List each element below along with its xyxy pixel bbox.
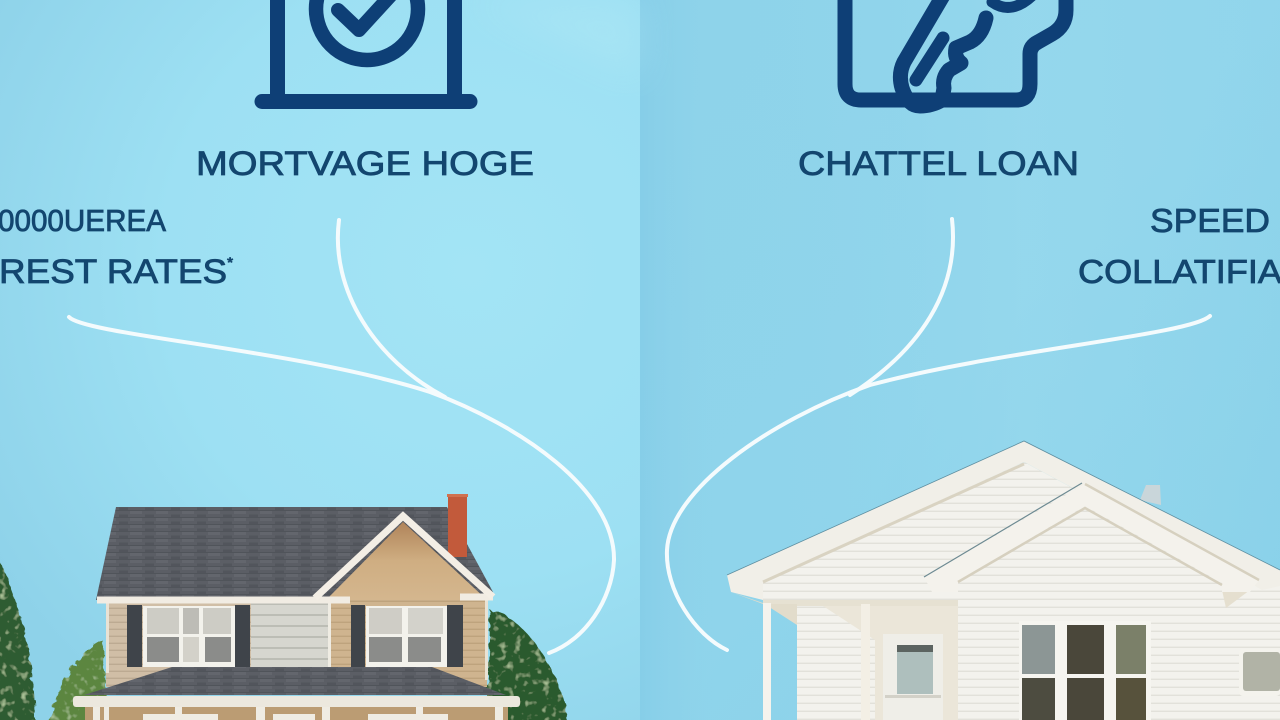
label: left upper: 0000UEREA (0, 203, 166, 238)
trees (0, 562, 568, 720)
soffit under front gable (1222, 590, 1250, 608)
illustration: right white house (727, 441, 1280, 720)
front gable trim shadows (958, 484, 1259, 585)
shutters (127, 605, 463, 667)
main roof (727, 441, 1280, 600)
walls (106, 597, 251, 687)
window left (143, 606, 235, 667)
window right (366, 606, 447, 667)
front gable trim (924, 484, 1259, 592)
heading: chattel loan: CHATTEL LOAN (798, 145, 1079, 183)
label: speed: SPEED (1150, 202, 1270, 239)
front gable wall (958, 506, 1225, 720)
label: interest rates: * (227, 254, 234, 270)
arrows: left curved lines (69, 220, 614, 653)
door (883, 634, 943, 720)
porch posts (93, 707, 503, 720)
label: collateral: COLLATIFIA (1078, 253, 1280, 290)
heading: mortgage: MORTVAGE HOGE (196, 145, 534, 183)
vent (1140, 485, 1161, 505)
porch posts (763, 603, 771, 720)
label: interest rates: REST RATES (0, 253, 209, 291)
illustration: left house with trees (0, 494, 568, 720)
eaves and gable trim (97, 597, 493, 600)
front gable (326, 522, 487, 600)
icon: mortgage house with check mark (262, 0, 470, 102)
right wing (1225, 578, 1280, 720)
main gable wall (763, 462, 1245, 603)
side window (1239, 649, 1280, 696)
porch roof (84, 667, 506, 695)
porch (797, 604, 958, 720)
upper roof (96, 507, 493, 600)
background: right panel (470, 0, 1280, 720)
background: left panel (0, 0, 640, 720)
large window (1019, 621, 1151, 720)
chimney (448, 494, 467, 557)
main roof inner shadow (763, 464, 1024, 582)
arrows: right curved lines (667, 219, 1210, 650)
porch band (73, 696, 520, 707)
icon: chattel loan house with key (845, 0, 1066, 106)
